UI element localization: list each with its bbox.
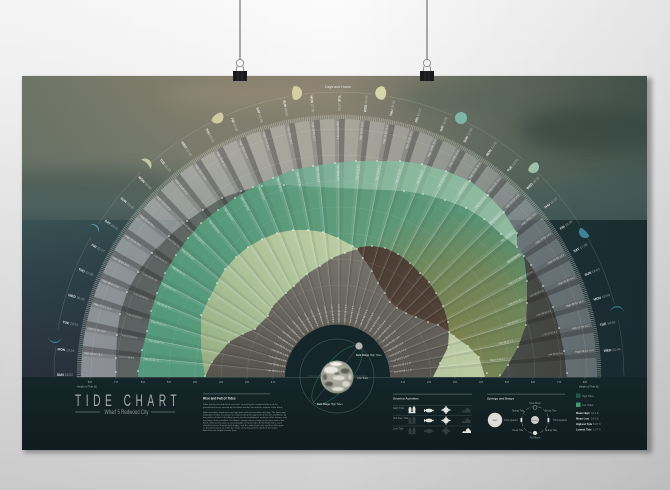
green layer labels, right: Tide 03:47 8.4: [508, 276, 523, 286]
brown layer: [357, 246, 449, 332]
icon: moon 2 crescent: [89, 222, 101, 234]
outer band labels, left: High 17:04 16.0: [262, 132, 271, 151]
date labels, left: [57, 95, 341, 377]
green layer labels, left: Tide 14:12 8.3: [240, 196, 250, 212]
outer band labels, right: High 07:44 14.3: [571, 323, 591, 331]
inner ring labels, right: Low 16:38 2.6 ft: [359, 309, 369, 327]
heading: Grunion Activities: [393, 396, 419, 400]
body copy: Tides are the rise and fall of sea levels caused by the combined effects of the: [203, 403, 278, 406]
inner ring labels, right: Low 18:57 2.4 ft: [373, 320, 387, 336]
green layer labels, left: Tide 08:03 7.6: [156, 302, 172, 310]
subtitle rules: [75, 411, 175, 413]
outer band labels, right: High 08:42 14.3: [575, 348, 594, 354]
inner ring labels, right: Low 15:06 2.8 ft: [349, 305, 355, 323]
date labels, right: SUN 11:56: [463, 127, 474, 143]
icon: moon: [355, 342, 363, 350]
axis tick labels: 4 ft: [193, 380, 197, 384]
outer band labels, left: High 18:59 16.3: [311, 122, 317, 141]
outer band labels, right: [358, 121, 594, 354]
outer band labels, right: High 23:09 15.9: [426, 138, 437, 157]
outer band labels, left: High 07:02 13.9: [87, 326, 107, 334]
outer band labels, right: High 02:13 14.8: [504, 193, 520, 209]
green layer labels, left: Tide 15:11 8.4: [257, 186, 266, 201]
outer band labels, left: High 14:59 15.7: [216, 151, 228, 169]
inner ring labels, right: Low 02:06 1.1 ft: [394, 369, 412, 374]
date labels, left: THU 21:33: [78, 267, 94, 277]
green layer labels, left: Tide 11:23 8.1: [193, 233, 206, 246]
phase labels: Neap Tide: [546, 410, 557, 412]
dark band labels: Low 14:38 8.1: [134, 292, 149, 301]
tick ring: [79, 117, 599, 377]
row labels: High Tide: [393, 406, 405, 410]
inner ring labels, left: Low 05:56 2.4 ft: [286, 325, 301, 340]
outer band labels, left: High 18:03 16.2: [286, 126, 294, 145]
dark band labels: Low 17:55 7.5: [181, 221, 194, 234]
icon: moon 5 gibbous: [292, 86, 302, 100]
date labels, right: MON 12:43: [485, 141, 498, 157]
baseline and axis ticks: [77, 377, 601, 379]
dark centre disc: [285, 324, 390, 377]
clip and string: left: [233, 0, 247, 81]
outer band labels, right: High 05:44 14.2: [557, 275, 576, 286]
date labels, left: TUE 20:02: [62, 320, 79, 327]
date labels, left: MON 19:14: [57, 347, 75, 353]
body copy: determine the height of water here.: [203, 429, 237, 432]
outer band labels, right: High 23:55 15.6: [448, 149, 460, 167]
inner ring labels, left: Low 00:12 1.2 ft: [266, 369, 285, 374]
inner ring labels, right: Low 20:37 2.0 ft: [381, 330, 397, 344]
axis title left: Height of Tide (ft): [77, 384, 97, 388]
outer band labels, left: High 11:09 15.1: [139, 214, 156, 229]
central earth and moon diagram: [285, 324, 390, 413]
outer band labels, right: High 20:44 16.4: [358, 121, 364, 140]
inner ring labels, left: Low 10:46 2.7 ft: [316, 307, 324, 325]
heading: Rise and Fall of Tides: [203, 396, 236, 400]
green layer labels, right: [355, 164, 523, 362]
inner ring labels, right: Low 18:10 2.5 ft: [369, 316, 381, 332]
green layer labels, right: Tide 19:45 8.7: [355, 164, 360, 180]
icon: earth: [320, 360, 354, 394]
axis tick labels: 2 ft: [245, 380, 249, 384]
tide statistics: 5.07 ft: [593, 422, 601, 426]
legend swatch: high tides: [576, 394, 580, 398]
inner ring labels, left: Low 12:36 2.8 ft: [330, 304, 335, 323]
icon: moon 1 thin crescent: [48, 336, 62, 343]
orbit labels: [317, 354, 382, 406]
tide statistics: [576, 411, 601, 432]
inner ring labels, left: [266, 304, 340, 374]
title block: [75, 392, 177, 416]
row 2 icons: [408, 416, 470, 424]
icon: first quarter: [520, 418, 522, 422]
outer band labels, left: High 19:52 16.4: [336, 121, 340, 140]
green layer labels, right: Tide 05:43 7.7: [506, 318, 522, 326]
green layer labels, right: Tide 01:14 9.3: [489, 212, 502, 225]
date labels, right: SAT 11:09: [439, 116, 449, 132]
legend: [576, 394, 601, 432]
dark band labels: Low 12:18 8.6: [119, 355, 135, 360]
green layer labels, left: Tide 07:15 7.4: [151, 320, 167, 328]
date labels, right: WED 20:44: [604, 347, 621, 353]
axis tick labels: 7 ft: [557, 380, 561, 384]
green layer labels, right: Tide 23:41 9.4: [458, 181, 469, 196]
inner ring labels, left: Low 08:49 2.6 ft: [303, 312, 314, 330]
row 3 icons: [408, 427, 471, 435]
green layer labels, right: Tide 02:02 9.1: [500, 231, 514, 243]
body copy: [203, 403, 287, 432]
dark band labels, right: Low 04:11 8.4: [519, 270, 534, 280]
inner ring labels, right: Low 19:46 2.2 ft: [377, 325, 392, 340]
date labels, right: SAT 17:06: [573, 242, 588, 253]
axis tick labels: 4 ft: [479, 380, 483, 384]
dark band labels, right: Low 08:02 8.8: [548, 352, 564, 356]
icon: moon 3 crescent: [140, 156, 154, 170]
dark band labels, right: [507, 252, 564, 356]
body copy: the pattern of tides in the deep ocean, by the amphidromic systems of the oceans, and: [203, 416, 287, 419]
light grey band: high tide range: [81, 119, 597, 377]
green layer labels, right: Tide 00:27 9.4: [474, 195, 487, 209]
green layer labels, left: Tide 06:28 7.2: [148, 339, 164, 345]
icon: moon 10 thin crescent: [610, 306, 624, 313]
orbit labels: Bulk Bulge High Tides: [356, 354, 382, 357]
inner ring labels, left: Low 07:50 2.5 ft: [297, 316, 309, 333]
date labels, left: TUE 01:22: [159, 158, 172, 173]
green layer labels, left: Tide 13:14 8.2: [223, 207, 234, 222]
orbit labels: Low Tides: [357, 377, 369, 380]
outer band labels, left: High 10:18 15.0: [124, 234, 142, 248]
green tide layer: [138, 161, 527, 377]
inner ring labels, left: Low 13:28 2.8 ft: [337, 304, 340, 322]
axis tick labels: 5 ft: [167, 380, 171, 384]
tide statistics: 14.0 ft: [591, 416, 599, 420]
inner ring labels, right: Low 21:30 1.8 ft: [384, 336, 401, 348]
date labels, right: THU 09:34: [389, 100, 396, 117]
tide statistics: 1.07 ft: [593, 428, 601, 432]
axis title right: Height of Tide (ft): [579, 384, 599, 388]
green layer labels, left: Tide 18:54 8.6: [336, 165, 339, 181]
heading: days and hours: Days and Hours: [325, 85, 351, 89]
axis tick labels: 6 ft: [141, 380, 145, 384]
spokes over green layers: [140, 161, 527, 370]
outer band labels, right: High 22:22 16.1: [404, 130, 413, 150]
legend swatch: low tides: [576, 402, 580, 407]
icon: third quarter: [548, 418, 549, 422]
inner ring labels, left: Low 05:02 2.3 ft: [281, 330, 297, 344]
outer band labels, right: High 00:41 15.3: [468, 161, 482, 179]
inner ring labels, left: Low 00:58 1.4 ft: [267, 362, 286, 368]
date labels, left: MON 00:33: [138, 176, 152, 190]
icon: new moon: [533, 406, 537, 410]
dark band labels: Low 16:14 7.7: [154, 254, 168, 265]
row 1 icons: [408, 406, 470, 414]
dark grey band: [116, 187, 567, 377]
date labels, left: SAT 05:08: [255, 107, 264, 123]
date labels, right: TUE 13:31: [506, 158, 519, 173]
phase labels: Spring Tide: [545, 429, 558, 432]
outer band labels, right: High 01:27 15.0: [487, 176, 502, 193]
boundary dots: [116, 161, 567, 376]
row labels: Low Tide: [393, 426, 404, 430]
axis tick labels: 6 ft: [531, 380, 535, 384]
inner ring labels, right: [343, 304, 412, 374]
inner ring labels, right: Low 15:52 2.7 ft: [354, 307, 362, 325]
inner ring labels, left: Low 06:52 2.4 ft: [291, 320, 305, 336]
dark band labels, right: Low 06:04 8.6: [536, 309, 552, 317]
inner ring labels, right: Low 14:18 2.8 ft: [343, 304, 348, 322]
inner ring labels, left: Low 04:10 2.2 ft: [277, 336, 294, 348]
subtitle: Wharf 5 Redwood City: [104, 410, 148, 416]
green layer labels, left: Tide 17:06 8.5: [295, 172, 301, 188]
phase labels: Full Moon: [530, 436, 541, 440]
poster: sky and sea photograph background: [0, 76, 660, 378]
date labels, left: WED 20:49: [68, 293, 85, 302]
green layer labels, left: Tide 08:51 7.8: [161, 283, 177, 293]
body copy: gravitational forces exerted by the Moon and the Sun and the rotation of the Earth.: [203, 406, 283, 409]
inner ring labels, left: Low 02:31 1.9 ft: [271, 348, 289, 358]
inner ring labels, left: Low 03:20 2.1 ft: [274, 342, 291, 353]
phase labels: New Moon: [529, 402, 541, 405]
dark band labels: Low 13:04 8.4: [122, 334, 138, 340]
date labels, left: WED 02:15: [180, 141, 193, 157]
body copy: the shape of the coastline. The Moon's gravity raises a bulge on the near side of the: [203, 419, 285, 422]
icon: moon 7 full: [455, 112, 467, 124]
row labels: [393, 406, 409, 430]
spokes over inner layers: [211, 246, 449, 372]
icon: moon 6 gibbous: [375, 86, 386, 100]
green layer labels, left: [144, 165, 339, 362]
icon: full moon: [533, 431, 537, 435]
outer band labels, left: High 07:51 14.3: [93, 302, 112, 311]
olive shade in green layer: [138, 161, 527, 377]
orbit labels: Bulk Bulge High Tides: [317, 403, 343, 406]
sun label: Sun: [493, 419, 498, 422]
panel: springs and neaps: [487, 394, 567, 440]
date labels, left: THU 03:11: [204, 128, 215, 143]
earth label: Earth: [533, 419, 538, 422]
date labels, right: FRI 10:22: [414, 108, 422, 123]
inner ring labels, left: Low 01:44 1.6 ft: [269, 355, 287, 363]
date labels, left: SAT 23:01: [104, 219, 119, 231]
axis tick labels: 7 ft: [114, 380, 118, 384]
grid arcs over green: [143, 161, 526, 376]
green layer labels, right: Tide 20:35 8.8: [375, 165, 381, 181]
outer band labels, right: High 21:34 16.3: [381, 125, 389, 144]
date labels, right: TUE 19:53: [599, 320, 616, 327]
date labels, right: WED 08:44: [363, 95, 369, 112]
outer band labels, left: High 06:12 13.4: [84, 351, 103, 357]
green layer labels, right: Tide 22:55 9.3: [437, 173, 447, 188]
inner ring labels, right: Low 23:21 1.4 ft: [389, 348, 407, 358]
legend text: Low Tides: [582, 404, 594, 407]
dark band labels: Low 17:04 7.6: [166, 237, 180, 249]
height grid arcs: [91, 129, 587, 377]
mint top tier: [253, 161, 517, 247]
panel: grunion activities: [393, 394, 472, 435]
clip and string: right: [420, 0, 434, 81]
green layer labels, right: Tide 21:23 8.9: [395, 168, 402, 184]
body copy: Earth, while inertia raises a second bulge on the far side. As the Earth turns, each: [203, 421, 283, 424]
tide statistics: Highest Tide: [576, 422, 593, 426]
date labels, right: FRI 16:09: [559, 219, 573, 231]
header rule: [487, 394, 565, 395]
dark band labels, right: Low 07:03 8.7: [542, 330, 558, 336]
outer band labels, right: High 04:46 14.3: [547, 253, 565, 265]
date labels, left: TUE 07:53: [337, 95, 341, 111]
green layer labels, left: Tide 10:31 8.0: [181, 249, 195, 261]
dark band labels: Low 13:51 8.3: [127, 313, 143, 320]
moon orbit: [522, 406, 548, 434]
grid arcs over inner: [220, 259, 449, 377]
date labels, left: SUN 18:22: [57, 373, 73, 377]
moon orbit: [300, 339, 374, 413]
days and hours outer arc: [54, 92, 624, 377]
text block: rise and fall of tides: [203, 393, 287, 432]
inner ring labels, left: Low 09:48 2.7 ft: [309, 309, 319, 327]
body copy: Most shorelines experience two high tides and two low tides each day. The times and: [203, 411, 286, 414]
green layer labels, left: Tide 12:18 8.1: [208, 220, 220, 234]
date labels, left: FRI 22:17: [91, 243, 105, 253]
row dividers: [393, 406, 472, 426]
heading: Springs and Neaps: [487, 396, 515, 400]
phase labels: [504, 402, 567, 440]
outer band labels, right: High 03:01 14.6: [520, 211, 537, 226]
icon: moon 4 gibbous: [210, 111, 226, 126]
legend text: High Tides: [582, 395, 595, 398]
green layer labels, right: Tide 04:44 8.0: [508, 298, 523, 307]
footer panel: [22, 377, 647, 450]
inner ring labels, right: Low 22:25 1.6 ft: [387, 342, 404, 353]
date labels, right: WED 14:21: [526, 175, 541, 190]
inner ring labels, right: Low 00:17 1.3 ft: [391, 355, 410, 363]
body copy: shoreline passes through both bulges, and the water level rises and then falls again: [203, 424, 285, 427]
date labels, right: SUN 18:03: [584, 267, 601, 277]
date labels, right: [363, 95, 621, 353]
date labels, right: THU 15:14: [543, 196, 558, 210]
dark band labels: [119, 221, 194, 360]
inner ring labels, left: Low 11:42 2.7 ft: [323, 306, 329, 324]
green layer labels, right: Tide 07:40 6.7: [490, 358, 506, 362]
row labels: Mid-Day Tide: [393, 416, 409, 420]
tide statistics: Mean Low: [576, 416, 590, 420]
date labels, left: SUN 06:05: [282, 100, 289, 117]
grey inner layer: [205, 249, 449, 377]
axis tick labels: 3 ft: [219, 380, 223, 384]
outer band labels, left: High 08:40 14.6: [101, 278, 120, 289]
body copy: as the planet turns on, while the shape of the bay and the depth of the harbor: [203, 427, 278, 430]
green layer labels, left: Tide 16:09 8.5: [275, 177, 283, 193]
axis tick labels: 3 ft: [453, 380, 457, 384]
phase labels: Spring Tide: [512, 410, 525, 412]
poster shadow: [24, 78, 652, 453]
axis tick labels: 5 ft: [505, 380, 509, 384]
axis tick labels: 8 ft: [88, 380, 92, 384]
outer band labels, left: High 16:02 15.9: [238, 140, 249, 159]
outer band labels, right: High 03:52 14.4: [534, 231, 552, 245]
tide statistics: Mean High: [576, 411, 590, 415]
axis tick labels: 8 ft: [583, 380, 587, 384]
icon: earth: [531, 416, 539, 424]
green layer labels, left: Tide 18:01 8.6: [315, 167, 320, 183]
dark band labels, right: Low 03:18 8.3: [507, 252, 522, 264]
dark band labels, right: Low 05:06 8.5: [529, 289, 545, 298]
phase labels: First Quarter: [504, 419, 518, 422]
green layer labels, left: Tide 05:40 7.1: [144, 358, 160, 362]
green layer labels, right: Tide 22:09 9.1: [416, 169, 425, 185]
icon: moon 8 gibbous: [527, 161, 541, 175]
outer band labels, right: High 06:44 14.2: [565, 299, 584, 308]
header rule: [393, 394, 472, 395]
phase labels: Third Quarter: [553, 419, 567, 422]
green layer labels, left: Tide 09:40 7.9: [171, 266, 186, 277]
green layer labels, right: Tide 02:53 8.8: [506, 253, 521, 264]
day spokes over grey bands: [82, 119, 596, 383]
moon phases around the arc: [48, 86, 624, 343]
tide statistics: 16.4 ft: [591, 411, 599, 415]
tide chart: semicircular layered radial chart: [79, 117, 599, 383]
axis tick labels: [88, 380, 587, 384]
pale green layer: [201, 230, 485, 377]
inner ring labels, right: Low 17:24 2.6 ft: [364, 312, 375, 329]
alignment lines: [308, 346, 367, 403]
inner ring labels, right: Low 01:12 1.2 ft: [393, 362, 411, 368]
icon: sun: [488, 413, 502, 427]
tide statistics: Lowest Tide: [576, 428, 592, 432]
axis tick labels: 2 ft: [427, 380, 431, 384]
date labels, left: FRI 04:09: [230, 117, 239, 132]
outer band labels, left: High 12:58 15.4: [174, 178, 189, 196]
body copy: amplitude of tides at a locale are influenced by the alignment of the Sun and Moon, by: [203, 414, 287, 417]
tidal bulge ellipse: [303, 338, 371, 412]
date labels, left: SUN 23:46: [120, 196, 135, 210]
date labels, left: MON 07:00: [309, 95, 315, 113]
phase labels: Neap Tide: [513, 429, 524, 432]
outer band labels, left: High 13:57 15.6: [194, 164, 208, 182]
outer band labels, left: High 12:02 15.3: [156, 195, 172, 211]
icon: moon 9 half: [577, 227, 590, 240]
title: TIDE CHART: [75, 392, 177, 410]
outer band labels, left: [84, 121, 340, 357]
dark band labels: Low 15:25 7.9: [143, 273, 158, 283]
date labels, right: MON 18:59: [593, 293, 610, 302]
outer band labels, left: High 09:29 14.8: [112, 255, 130, 268]
axis tick labels: 1 ft: [401, 380, 405, 384]
axis tick labels: 1 ft: [271, 380, 275, 384]
header rule: [203, 393, 270, 394]
green layer labels, right: Tide 06:42 7.2: [498, 339, 514, 345]
